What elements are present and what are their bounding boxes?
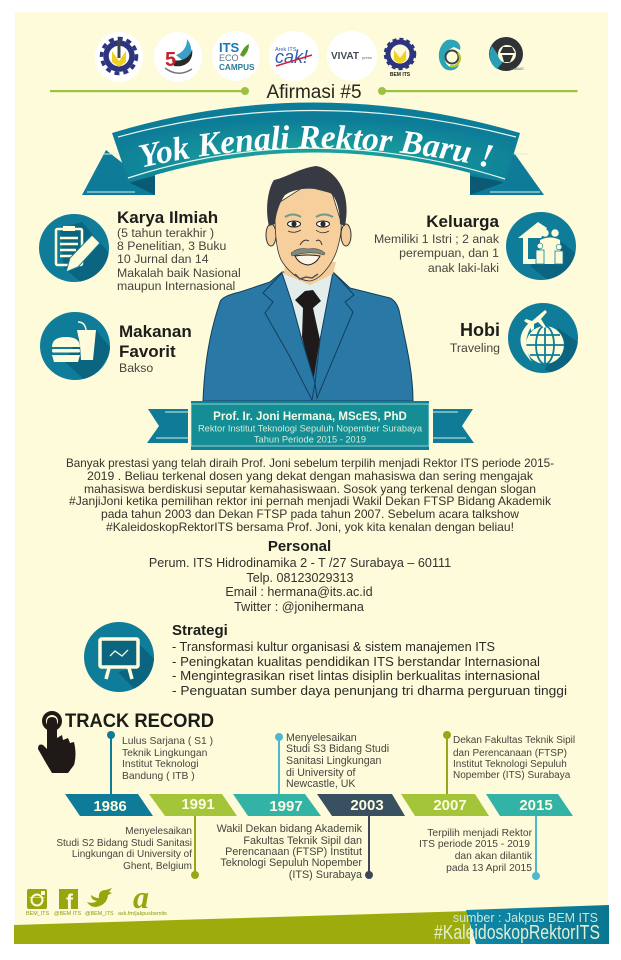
milestone 1986: Lulus Sarjana ( S1 ): [122, 736, 213, 747]
title ribbon: [82, 102, 544, 195]
personal contact block: Email : hermana@its.ac.id: [225, 585, 373, 599]
milestone 2015: 2015: [519, 797, 553, 814]
logo: Arek ITS cak: [269, 31, 319, 81]
afirmasi heading with lines: [50, 82, 578, 103]
milestone 1997: Studi S3 Bidang Studi: [286, 743, 389, 755]
heading: [119, 322, 192, 361]
milestone 1997: di University of: [286, 767, 356, 779]
personal contact block: Telp. 08123029313: [246, 571, 354, 585]
details: [374, 232, 500, 275]
milestone 1991: Ghent, Belgium: [123, 861, 192, 872]
panel: strategi: [84, 622, 567, 698]
name banner: Tahun Periode 2015 - 2019: [254, 434, 366, 444]
panel: hobi: [450, 303, 582, 378]
panel: karya ilmiah: [39, 208, 241, 293]
milestone 2015: ITS periode 2015 - 2019: [419, 839, 530, 850]
mouth: [295, 255, 320, 265]
milestone 1991: Menyelesaikan: [125, 826, 192, 837]
icon: instagram: [26, 889, 49, 917]
logo: ITS Eco Campus: ECO: [219, 53, 239, 63]
milestone 1986: Teknik Lingkungan: [122, 748, 208, 759]
details: Traveling: [450, 341, 500, 355]
personal contact block: Perum. ITS Hidrodinamika 2 - T /27 Surabaya – 60111: [149, 556, 451, 570]
eyebrows: [285, 214, 333, 217]
ribbon left tail: [82, 150, 155, 195]
milestone 2015: dan akan dilantik: [455, 851, 533, 862]
heading: Hobi: [460, 320, 500, 340]
milestone 1986: Bandung ( ITB ): [122, 771, 195, 782]
lapels: [263, 273, 315, 400]
milestone 1991: [56, 794, 237, 879]
logo: ITS Eco Campus: ITS: [219, 40, 240, 55]
moustache: [291, 248, 325, 256]
icon: plane and globe: [508, 303, 578, 373]
details: perempuan, dan 1: [399, 246, 499, 260]
milestone 1986: 1986: [93, 798, 127, 815]
icon: family and house: [506, 212, 576, 280]
nose: [300, 240, 322, 245]
logo: ITS Eco Campus: CAMPUS: [219, 63, 255, 72]
details: 8 Penelitian, 3 Buku: [117, 239, 227, 253]
logo: dolphin ring: [439, 40, 460, 70]
panel: keluarga: [375, 212, 576, 280]
source text: sumber : Jakpus BEM ITS: [453, 911, 598, 925]
strategy list: - Penguatan sumber daya penunjang tri dharma perguruan tinggi: [172, 683, 567, 698]
social media icons: [26, 879, 167, 917]
ears: [266, 224, 276, 246]
details: Memiliki 1 Istri ; 2 anak: [374, 232, 500, 246]
icon: burger and drink: [40, 312, 112, 385]
afirmasi heading with lines: Afirmasi #5: [266, 82, 362, 103]
neck: [284, 262, 336, 285]
milestone 2007: dan Perencanaan (FTSP): [453, 748, 567, 759]
milestone 2003: Teknologi Sepuluh Nopember: [220, 857, 362, 869]
milestone 2003: Wakil Dekan bidang Akademik: [217, 823, 363, 835]
track record heading: TRACK RECORD: [65, 710, 214, 732]
logo: BEM ITS: [385, 39, 415, 78]
shirt collar: [282, 272, 333, 385]
milestone 1991: 1991: [181, 796, 215, 813]
panel: makanan favorit: [40, 312, 192, 385]
blue source panel: [466, 905, 609, 944]
strategy list: - Peningkatan kualitas pendidikan ITS berstandar Internasional: [172, 654, 540, 669]
green band: [14, 911, 470, 944]
name text: Prof. Ir. Joni Hermana, MScES, PhD: [213, 411, 407, 423]
icon: clipboard and pencil: [39, 214, 109, 282]
milestone 1997: Newcastle, UK: [286, 778, 355, 790]
details: Bakso: [119, 361, 153, 375]
name banner: [147, 401, 474, 450]
icon: facebook: f: [66, 891, 74, 914]
heading: Keluarga: [426, 212, 500, 231]
icon: twitter: [85, 888, 114, 917]
icon: twitter: @BEM_ITS: [85, 911, 114, 917]
heading: Karya Ilmiah: [117, 208, 218, 227]
timeline: [56, 731, 575, 881]
logo: Vivat: press: [362, 55, 372, 60]
banner body: [191, 401, 429, 450]
icon: ask.fm: [118, 879, 167, 917]
milestone 2007: Institut Teknologi Sepuluh: [453, 759, 567, 770]
portrait of the rector: [203, 166, 413, 401]
logo: Arek ITS cak: Arek ITS: [275, 47, 297, 53]
details: maupun Internasional: [117, 279, 235, 293]
tie: [295, 290, 321, 382]
milestone 2003: Fakultas Teknik Sipil dan: [243, 835, 362, 847]
milestone 2015: [419, 794, 573, 880]
strategy list: - Transformasi kultur organisasi & sistem manajemen ITS: [172, 639, 495, 654]
ribbon main arc: [112, 102, 520, 183]
logo: ITS Eco Campus: [212, 31, 260, 81]
heading: Makanan: [119, 322, 192, 341]
goatee: [295, 274, 318, 279]
milestone 2007: Dekan Fakultas Teknik Sipil: [453, 735, 575, 746]
milestone 2003: [217, 794, 405, 881]
heading: Personal: [268, 538, 331, 555]
personal contact block: [149, 538, 451, 614]
footer band: [14, 905, 609, 944]
strategy list: [172, 639, 567, 698]
milestone 2007: [401, 731, 575, 816]
logo: Arek ITS cak: cak!: [275, 47, 308, 67]
eyes: [288, 221, 330, 233]
icon: presentation board: [84, 622, 154, 692]
logo: ITS gear: [95, 32, 143, 82]
intro paragraph: #KaleidoskopRektorITS bersama Prof. Joni, yok kita kenalan dengan beliau!: [106, 521, 514, 534]
ribbon title text: Yok Kenali Rektor Baru !: [138, 125, 494, 167]
logo: camera shutter: HUMAS: [511, 67, 524, 71]
icon: facebook: [54, 889, 81, 917]
milestone 1986: Institut Teknologi: [122, 759, 199, 770]
intro paragraph: Banyak prestasi yang telah diraih Prof. Joni sebelum terpilih menjadi Rektor ITS periode 2015-: [66, 457, 554, 470]
details: [117, 226, 241, 293]
icon: facebook: @BEM ITS: [54, 911, 81, 917]
heading: Strategi: [172, 622, 228, 639]
intro paragraph: 2019 . Beliau terkenal dosen yang dekat dengan mahasiswa dan sering mengajak: [87, 470, 533, 483]
banner tails: [147, 409, 188, 443]
milestone 2003: (ITS) Surabaya: [289, 869, 362, 881]
heading: Favorit: [119, 342, 176, 361]
details: (5 tahun terakhir ): [117, 226, 214, 240]
logo: ITS 55: [154, 32, 202, 82]
logo: BEM ITS: BEM ITS: [390, 72, 411, 78]
milestone 1986: [65, 731, 213, 816]
milestone 1997: [233, 732, 389, 816]
details: Makalah baik Nasional: [117, 266, 241, 280]
milestone 2007: Nopember (ITS) Surabaya: [453, 770, 571, 781]
role text: Rektor Institut Teknologi Sepuluh Nopember Surabaya: [198, 424, 423, 434]
logo: Vivat: [327, 31, 377, 81]
intro paragraph: [66, 457, 554, 534]
logo row: [95, 31, 524, 82]
logo: Vivat: VIVAT: [331, 51, 359, 62]
ribbon right tail: [470, 150, 544, 195]
hair: [267, 166, 347, 226]
logo: camera shutter: [489, 37, 524, 71]
milestone 2015: Terpilih menjadi Rektor: [427, 828, 533, 839]
intro paragraph: pada tahun 2003 dan Dekan FTSP pada tahun 2007. Sebelum acara talkshow: [101, 508, 520, 521]
face: [275, 186, 341, 281]
details: 10 Jurnal dan 14: [117, 252, 209, 266]
icon: ask.fm: ask.fm/jakpusbemits: [118, 911, 167, 917]
icon: instagram: BEM_ITS: [26, 911, 49, 917]
milestone 1991: Studi S2 Bidang Studi Sanitasi: [56, 838, 192, 849]
intro paragraph: mahasiswa berdiskusi seputar kemahasiswaan. Sosok yang terkenal dengan slogan: [84, 483, 536, 496]
milestone 1997: 1997: [269, 798, 303, 815]
personal contact block: Twitter : @jonihermana: [234, 600, 364, 614]
milestone 2015: pada 13 April 2015: [446, 863, 532, 874]
milestone 1991: Lingkungan di University of: [72, 849, 192, 860]
icon: pointing hand: [38, 713, 76, 773]
milestone 2003: Perencanaan (FTSP) Institut: [225, 846, 362, 858]
milestone 2007: 2007: [433, 797, 467, 814]
intro paragraph: #JanjiJoni ketika pemilihan rektor ini pernah menjadi Wakil Dekan FTSP Bidang Akademik: [69, 495, 551, 508]
milestone 2003: 2003: [350, 797, 384, 814]
details: anak laki-laki: [428, 261, 499, 275]
icon: ask.fm: a: [133, 879, 149, 915]
strategy list: - Mengintegrasikan riset lintas disiplin berkualitas internasional: [172, 668, 540, 683]
milestone 1997: Menyelesaikan: [286, 732, 357, 744]
suit: [203, 272, 413, 401]
milestone 1997: Sanitasi Lingkungan: [286, 755, 382, 767]
logo: ITS 55: 5: [165, 49, 176, 71]
